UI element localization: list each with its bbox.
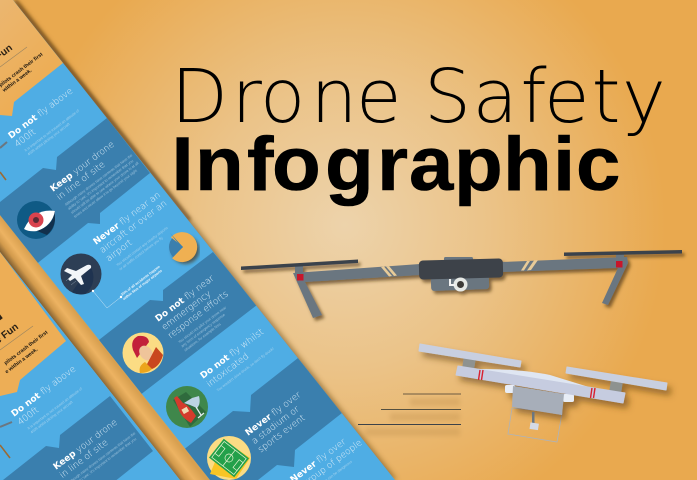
text: do not fly above: 400ft — [16, 405, 41, 428]
text: never fly near an airport: aircraft or over an — [98, 199, 169, 256]
text: stadium: Never fly over — [244, 390, 303, 438]
header divider — [0, 47, 27, 67]
text: intoxicated: You wouldn't drive drunk, so don't fly drunk! — [216, 347, 275, 393]
stripes — [381, 260, 538, 276]
text: keep in line of site — [50, 142, 138, 218]
lower body — [431, 275, 489, 291]
band: stadium — [185, 358, 342, 480]
icon: stadium pitch — [207, 436, 251, 480]
panel: upper infographic strip — [0, 0, 400, 480]
camera — [454, 278, 468, 292]
text: emergency efforts: emmergency — [160, 289, 213, 333]
main arm — [456, 366, 625, 403]
panel: orange gap between infographic strips — [0, 215, 210, 480]
band: light blue base — [0, 252, 180, 480]
band: keep in sight — [3, 396, 153, 480]
grey box — [512, 386, 564, 415]
text: never fly near an airport: Never fly near an — [92, 190, 163, 247]
icon: firefighter — [122, 332, 164, 374]
text: keep in line of site: should still be able to see where your drone is at all — [70, 161, 140, 215]
text: keep in line of site: in line of site — [58, 438, 110, 480]
text: do not fly above: It is important to not exceed an altitude of — [24, 108, 81, 153]
callout text: within 5km of major airports — [121, 269, 163, 302]
text: emergency efforts: response efforts — [166, 289, 231, 341]
icon: bottle and glass — [166, 386, 208, 428]
header statement: e within a week. — [4, 346, 40, 375]
callout connector — [92, 290, 122, 308]
text: keep in line of site: in line of site — [55, 160, 107, 203]
band: light blue base — [0, 0, 400, 480]
title line 2: Infographic — [171, 121, 620, 207]
text: do not fly above: 400ft whilst piloting your aircraft — [27, 122, 70, 157]
gimbal — [532, 412, 534, 424]
header divider — [0, 326, 33, 350]
text: keep in line of site — [52, 420, 136, 480]
band: orange header — [0, 252, 66, 396]
title line 1: Drone Safety — [171, 54, 666, 140]
text: keep in line of site: ability to 'see', it's important to remember that you — [67, 159, 134, 211]
text: do not fly above: It is important to not exceed an altitude of — [27, 386, 84, 431]
text: do not fly above: 400ft whilst piloting your aircraft — [30, 400, 73, 435]
small drone fragment — [0, 422, 12, 458]
red lights — [297, 274, 304, 280]
text: keep in line of site: Although many drones have cameras that have the — [64, 153, 133, 207]
title — [171, 54, 666, 207]
white blocks — [505, 385, 515, 393]
band: emergency — [99, 252, 256, 394]
text: never fly near an airport: airport — [104, 238, 135, 264]
band: keep in sight — [0, 118, 150, 263]
speed lines — [358, 394, 461, 436]
illustration: white quadcopter — [419, 344, 667, 442]
callout text: 35% of all accidents happen — [120, 265, 161, 297]
panel: lower infographic strip — [0, 252, 180, 480]
icon: pie chart — [169, 231, 199, 263]
top tab — [444, 257, 473, 264]
left propeller — [241, 260, 358, 270]
text: intoxicated: intoxicated — [205, 352, 251, 390]
text: keep in line of site: Keep your drone — [52, 418, 120, 472]
text: never fly near an airport: You should contact any nearby airports — [115, 226, 169, 267]
text: intoxicated: Do not fly whilst — [199, 327, 266, 381]
icon: eye — [17, 201, 55, 239]
right propeller — [566, 367, 667, 390]
right propeller — [564, 250, 682, 256]
text: do not fly above: Do not fly above — [7, 86, 75, 141]
propeller posts — [462, 358, 476, 369]
text: emergency efforts: You should not pilot your drone near — [177, 305, 228, 344]
text: never fly near an airport — [92, 193, 168, 270]
camera frame — [508, 408, 562, 442]
text: emergency efforts: situations, for example fires — [183, 322, 222, 352]
text: stadium: a stadium or — [250, 404, 302, 447]
text: never fly near an airport: or air traffic control before you fly — [118, 236, 164, 271]
band: orange header — [0, 0, 63, 116]
text: keep in line of site: times and never allow it to go beyond your sight — [73, 169, 138, 219]
text: do not fly above: Do not fly above — [10, 364, 78, 419]
propeller posts — [295, 266, 303, 274]
icon: plane — [60, 254, 102, 294]
small drone fragment — [0, 142, 7, 180]
header statement: pilots crash their first — [3, 330, 49, 367]
text: emergency efforts: any form of emergency response — [180, 313, 226, 348]
text: keep in line of site: Keep your drone — [49, 140, 117, 194]
text: stadium: sports event — [256, 413, 308, 455]
header statement: within a week. — [1, 67, 34, 94]
arms — [293, 264, 420, 318]
red stripes — [478, 370, 595, 398]
main body — [419, 258, 503, 280]
text: emergency efforts: Do not fly near — [154, 274, 217, 324]
strip shadow — [0, 0, 397, 480]
text: do not fly above: 400ft — [13, 127, 38, 150]
left propeller — [419, 344, 521, 367]
text: emergency efforts — [154, 275, 228, 352]
canopy — [480, 369, 608, 393]
illustration: folding drone — [241, 250, 682, 318]
